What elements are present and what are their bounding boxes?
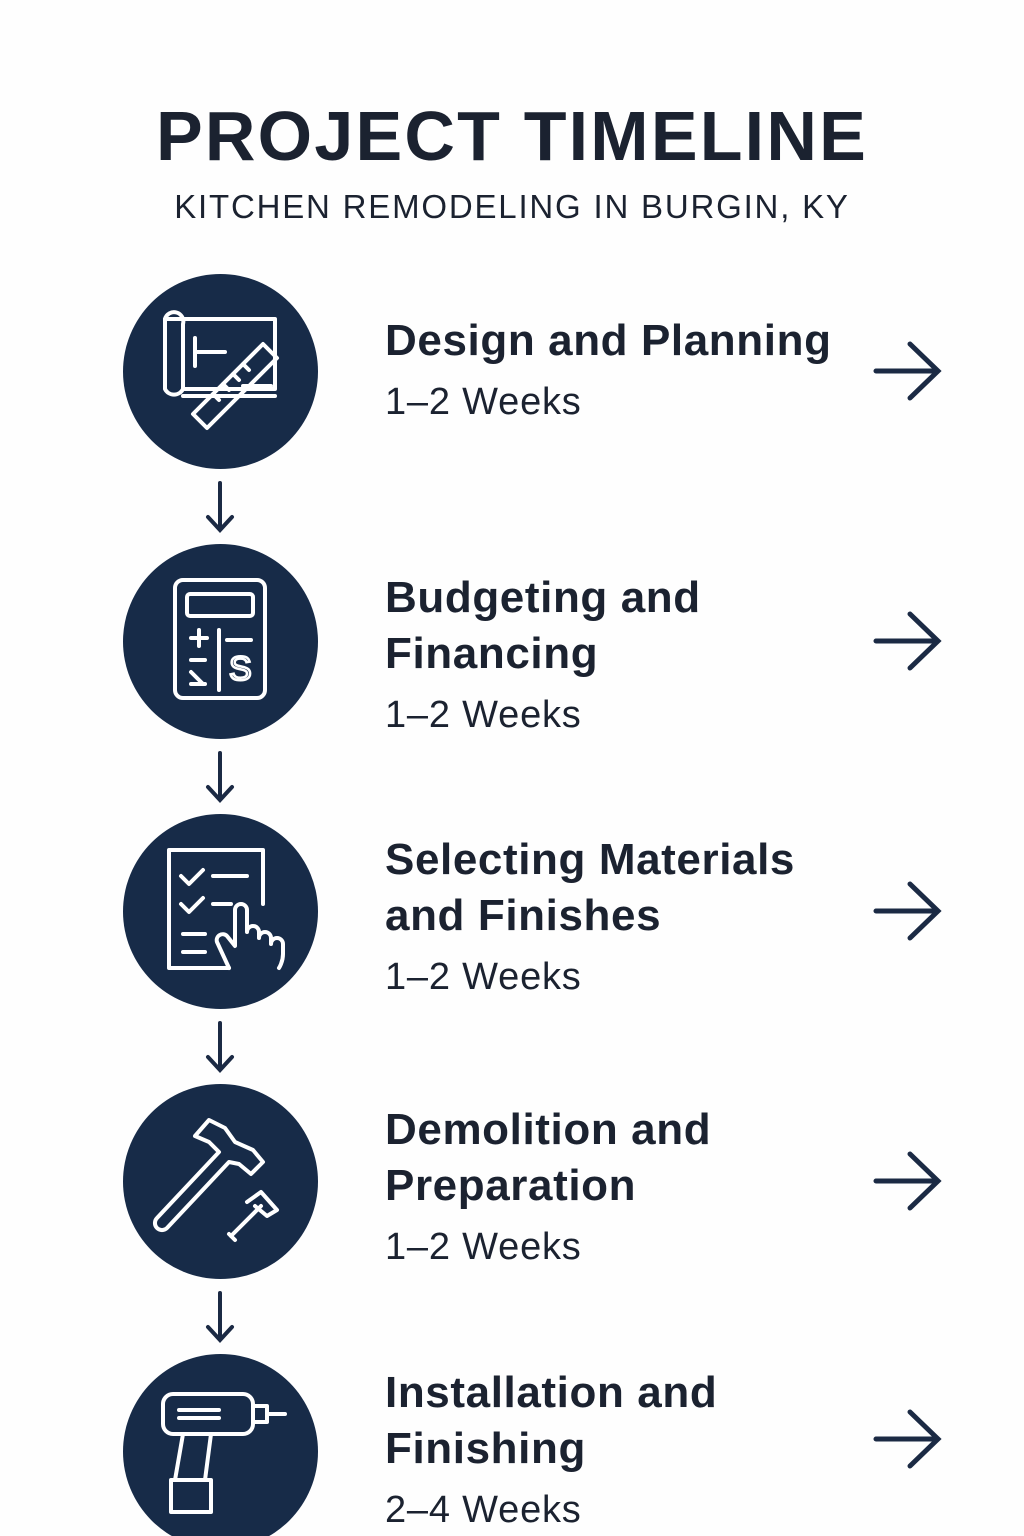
step 3 text xyxy=(385,835,795,998)
arrow down 2 xyxy=(206,751,234,803)
step 5 text: Installation and xyxy=(385,1368,717,1417)
step 3 text: 1–2 Weeks xyxy=(385,956,582,998)
title: PROJECT TIMELINE xyxy=(156,97,868,175)
arrow right 2 xyxy=(874,612,942,670)
step 3 text: and Finishes xyxy=(385,891,661,940)
step 2 text xyxy=(385,573,701,736)
step 1 icon: blueprint xyxy=(123,274,318,469)
arrow right 1 xyxy=(874,342,942,400)
arrow right 5 xyxy=(874,1410,942,1468)
step 1 text: 1–2 Weeks xyxy=(385,381,582,423)
step 3 icon: checklist xyxy=(123,814,318,1009)
step 2 text: 1–2 Weeks xyxy=(385,694,582,736)
step 5 text: 2–4 Weeks xyxy=(385,1489,582,1531)
step 5 text xyxy=(385,1368,717,1531)
step 4 text: 1–2 Weeks xyxy=(385,1226,582,1268)
arrow right 3 xyxy=(874,882,942,940)
step 2 text: Budgeting and xyxy=(385,573,701,622)
step 4 icon: hammers xyxy=(123,1084,318,1279)
step 4 text xyxy=(385,1105,711,1268)
step 5 text: Finishing xyxy=(385,1424,586,1473)
step 2 text: Financing xyxy=(385,629,598,678)
step 5 icon: drill xyxy=(123,1354,318,1536)
arrow down 4 xyxy=(206,1291,234,1343)
arrow down 1 xyxy=(206,481,234,533)
step 1 text: Design and Planning xyxy=(385,316,832,365)
step 2 icon: calculator xyxy=(123,544,318,739)
step 3 text: Selecting Materials xyxy=(385,835,795,884)
step 1 text xyxy=(385,316,832,423)
subtitle: KITCHEN REMODELING IN BURGIN, KY xyxy=(174,188,850,225)
step 4 text: Demolition and xyxy=(385,1105,711,1154)
step 4 text: Preparation xyxy=(385,1161,636,1210)
step 2 icon: calculator: S xyxy=(229,650,252,688)
arrow down 3 xyxy=(206,1021,234,1073)
arrow right 4 xyxy=(874,1152,942,1210)
